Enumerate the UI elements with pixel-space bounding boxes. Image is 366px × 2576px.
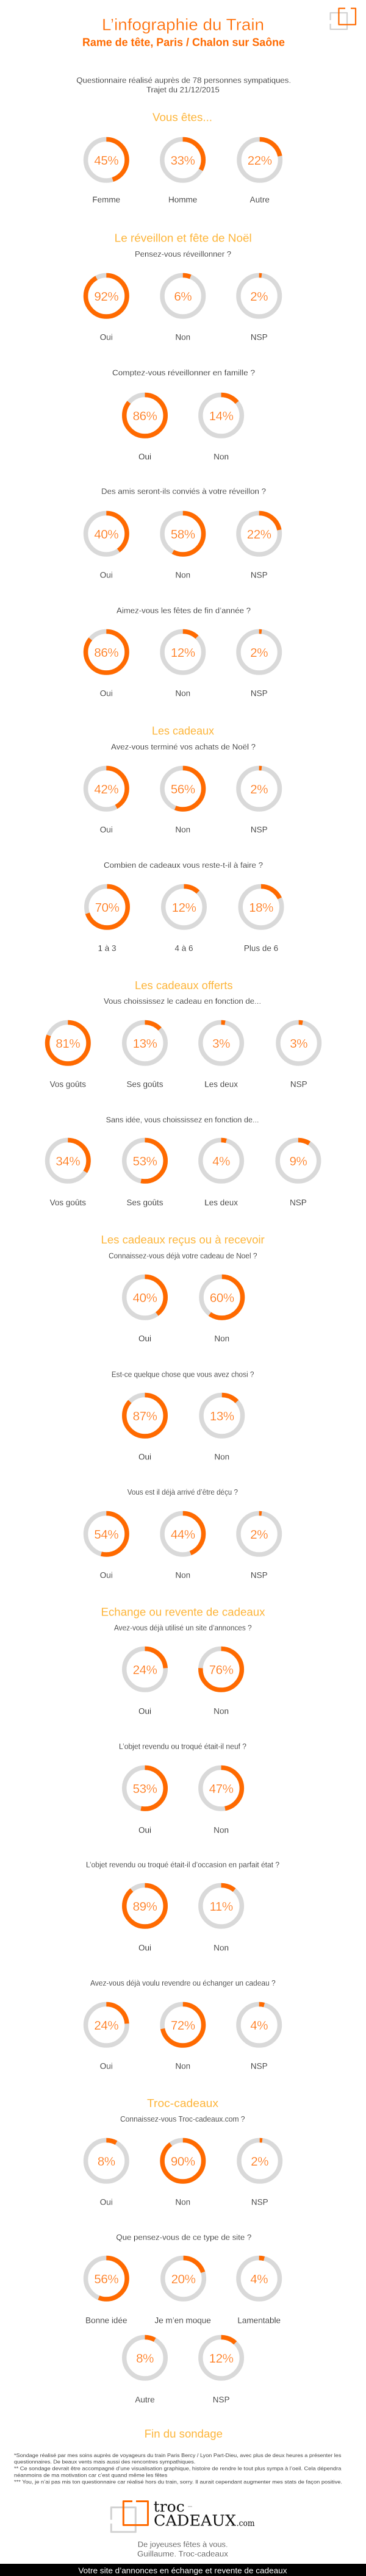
donut: Oui 40% — [86, 513, 127, 580]
donut: Non 47%: 47% — [209, 1782, 234, 1796]
question: Connaissez-vous Troc-cadeaux.com ? — [120, 2114, 245, 2123]
footer bar — [0, 2564, 366, 2576]
panel: connaissez-vous Troc-cadeaux — [86, 2114, 280, 2206]
donut: Je m'en moque 20%: 20% — [171, 2272, 196, 2286]
donut: NSP 2% — [239, 2141, 280, 2206]
donut: Les deux 3%: Les deux — [204, 1080, 238, 1089]
intro text — [76, 76, 291, 95]
donut: Oui 40%: Oui — [100, 571, 113, 580]
donut: Non 60%: Non — [214, 1334, 229, 1343]
donut: Lamentable 4% — [237, 2258, 281, 2325]
panel: connaissez-vous votre cadeau — [109, 1251, 257, 1343]
donut: Oui 24%: 24% — [133, 1663, 157, 1677]
donut: Oui 8%: Oui — [100, 2197, 113, 2206]
donut: Bonne idée 56% — [85, 2258, 127, 2325]
donut: Oui 40%: Oui — [138, 1334, 151, 1343]
donut: NSP 22% — [239, 513, 279, 580]
donut: Non 44% — [162, 1514, 204, 1580]
donut: NSP 4% — [239, 2005, 279, 2071]
donut: Vos goûts 34%: Vos goûts — [50, 1198, 86, 1207]
donut: Non 90%: 90% — [171, 2155, 195, 2169]
donut: Non 11%: Non — [214, 1943, 229, 1952]
heading: Troc-cadeaux: Troc-cadeaux — [147, 2097, 218, 2109]
panel: revendre ou échanger — [86, 1978, 279, 2071]
donut: Lamentable 4%: 4% — [250, 2272, 268, 2286]
donut: NSP 2%: 2% — [250, 290, 268, 304]
footnotes: ** Ce sondage devrait être accompagné d’une visualisation graphique, histoire de rendre le tout plus sympa à l’oeil. Cela dépendra — [14, 2466, 342, 2472]
subtitle: Rame de tête, Paris / Chalon sur Saône — [82, 36, 285, 48]
donut: Non 58% — [162, 513, 204, 580]
panel: Des amis conviés — [86, 487, 279, 580]
donut: Femme 45%: 45% — [94, 154, 118, 168]
donut: NSP 9% — [278, 1140, 319, 1207]
donut: Non 90% — [162, 2141, 204, 2206]
donut: Oui 54% — [86, 1514, 127, 1580]
donut: Non 72%: 72% — [171, 2019, 195, 2033]
donut: NSP 2%: NSP — [251, 2197, 268, 2206]
question: Avez-vous terminé vos achats de Noël ? — [111, 742, 256, 751]
donut: Vos goûts 81% — [48, 1023, 88, 1089]
question: L’objet revendu ou troqué était-il d’occasion en parfait état ? — [86, 1860, 279, 1869]
icon: logo squares — [111, 2502, 148, 2532]
donut: Oui 89%: 89% — [133, 1900, 157, 1914]
donut: NSP 9%: NSP — [290, 1198, 307, 1207]
panel: achats de Noël — [86, 742, 279, 834]
donut: Oui 86%: Oui — [138, 453, 151, 462]
donut: Non 72%: Non — [175, 2062, 190, 2071]
logo wordmark: .com — [237, 2519, 255, 2528]
donut: Non 14%: 14% — [209, 409, 234, 423]
donut: Oui 86%: 86% — [94, 646, 118, 660]
donut: NSP 12%: 12% — [209, 2352, 234, 2366]
panel: quelque chose de choisi — [112, 1370, 254, 1462]
title: L’infographie du Train — [102, 15, 264, 34]
panel: cadeaux restants — [87, 860, 282, 953]
donut: Autre 22% — [239, 140, 280, 204]
donut: Non 6%: 6% — [174, 290, 192, 304]
donut: Oui 87% — [124, 1395, 165, 1462]
donut: Non 13%: 13% — [210, 1409, 234, 1423]
donut: 4 à 6 12%: 12% — [172, 901, 196, 915]
footnotes: questionnaires. De beaux vents mais aussi des rencontres sympathiques. — [14, 2459, 195, 2465]
icon: corner logo squares — [331, 9, 356, 29]
donut: Oui 92%: Oui — [100, 333, 113, 342]
donut: NSP 2% — [239, 632, 279, 698]
donut: NSP 2% — [239, 1514, 279, 1580]
donut: NSP 2%: NSP — [251, 1571, 268, 1580]
donut: Vos goûts 81%: Vos goûts — [50, 1080, 86, 1089]
donut: Plus de 6 18%: Plus de 6 — [244, 943, 278, 953]
donut: NSP 4%: 4% — [250, 2019, 268, 2033]
donut: Oui 89%: Oui — [138, 1943, 151, 1952]
donut: Oui 24% — [86, 2005, 127, 2071]
donut: Lamentable 4%: Lamentable — [237, 2316, 281, 2325]
donut: Vos goûts 34%: 34% — [56, 1154, 80, 1168]
donut: Ses goûts 53% — [124, 1140, 165, 1207]
donut: Oui 42%: 42% — [94, 782, 118, 796]
heading: Les cadeaux: Les cadeaux — [152, 724, 214, 737]
donut: Oui 87%: 87% — [133, 1409, 157, 1423]
donut: NSP 2%: 2% — [251, 2155, 268, 2169]
donut: Non 14% — [201, 395, 242, 462]
footnotes: *** You, je n’ai pas mis ton questionnaire car réalisé hors du train, sorry. Il aurait cependant augmenter mes stats de façon positive. — [14, 2478, 342, 2485]
panel: sans idée — [48, 1115, 319, 1207]
donut: NSP 2% — [239, 276, 279, 342]
question: Aimez-vous les fêtes de fin d’année ? — [117, 606, 251, 615]
panel: site d'annonces — [114, 1623, 252, 1716]
question: L’objet revendu ou troqué était-il neuf ? — [119, 1742, 246, 1751]
donut: Oui 87%: Oui — [138, 1453, 151, 1462]
heading: Fin du sondage: Fin du sondage — [145, 2428, 223, 2440]
donut: Ses goûts 13%: 13% — [133, 1037, 157, 1051]
donut: 4 à 6 12%: 4 à 6 — [174, 943, 193, 953]
donut: Non 6%: Non — [175, 333, 190, 342]
donut: Oui 24%: 24% — [94, 2019, 118, 2033]
question: Combien de cadeaux vous reste-t-il à faire ? — [104, 860, 263, 870]
donut: Homme 33%: Homme — [168, 195, 197, 204]
donut: Non 56%: Non — [175, 825, 190, 834]
donut: Les deux 3%: 3% — [212, 1037, 230, 1051]
panel: Pensez-vous réveillonner — [86, 249, 279, 342]
donut: Femme 45% — [86, 140, 127, 204]
donut: Oui 24% — [124, 1649, 165, 1716]
donut: Non 12%: Non — [175, 689, 190, 698]
logo wordmark: troc — [154, 2498, 185, 2515]
donut: NSP 12%: NSP — [213, 2395, 229, 2404]
donut: Oui 86%: Oui — [100, 689, 113, 698]
donut: Non 47% — [201, 1768, 242, 1834]
donut: Non 76% — [201, 1649, 242, 1716]
donut: Oui 40% — [124, 1277, 165, 1343]
donut: Non 14%: Non — [214, 453, 229, 462]
donut: Non 72% — [162, 2005, 204, 2071]
donut: Ses goûts 53%: Ses goûts — [126, 1198, 163, 1207]
donut: Non 11%: 11% — [209, 1900, 233, 1914]
donut: Non 47%: Non — [214, 1825, 229, 1834]
donut: Non 90%: Non — [175, 2197, 190, 2206]
donut: Non 12% — [162, 632, 204, 698]
heading: Les cadeaux reçus ou à recevoir: Les cadeaux reçus ou à recevoir — [101, 1234, 265, 1246]
donut: Non 56% — [162, 768, 204, 834]
donut: Oui 24%: Oui — [138, 1706, 151, 1716]
donut: Homme 33% — [162, 140, 203, 204]
donut: NSP 22%: 22% — [247, 528, 271, 542]
donut: Je m'en moque 20% — [154, 2258, 211, 2325]
sign-off text — [137, 2539, 229, 2558]
donut: Oui 53%: Oui — [138, 1825, 151, 1834]
donut: Oui 8%: 8% — [98, 2155, 115, 2169]
donut: Bonne idée 56%: Bonne idée — [85, 2316, 127, 2325]
intro text: Trajet du 21/12/2015 — [146, 85, 220, 95]
donut: Non 6% — [162, 276, 204, 342]
question: Pensez-vous réveillonner ? — [135, 249, 231, 259]
donut: Autre 8%: 8% — [136, 2352, 154, 2366]
donut: Oui 42% — [86, 768, 127, 834]
donut: NSP 2%: NSP — [251, 825, 268, 834]
donut: Oui 92% — [86, 276, 127, 342]
logo wordmark: CADEAUX — [154, 2512, 237, 2530]
donut: Non 60%: 60% — [210, 1291, 234, 1305]
question: Avez-vous déjà utilisé un site d’annonces ? — [114, 1623, 252, 1632]
donut: 1 à 3 70% — [87, 887, 127, 953]
donut: Non 11% — [201, 1886, 242, 1952]
sign-off text: De joyeuses fêtes à vous. — [138, 2539, 228, 2549]
question: Que pensez-vous de ce type de site ? — [116, 2233, 251, 2242]
sign-off text: Guillaume. Troc-cadeaux — [137, 2549, 229, 2558]
question: Des amis seront-ils conviés à votre réveillon ? — [101, 487, 266, 496]
logo wordmark — [154, 2498, 255, 2530]
panel: déjà déçu — [86, 1487, 279, 1580]
donut: Vos goûts 34% — [48, 1140, 88, 1207]
donut: 1 à 3 70%: 1 à 3 — [98, 943, 117, 953]
donut: Oui 86% — [124, 395, 165, 462]
donut: Autre 22%: Autre — [250, 195, 270, 204]
question: Est-ce quelque chose que vous avez chosi ? — [112, 1370, 254, 1379]
donut: NSP 2%: NSP — [251, 333, 268, 342]
panel: choix du cadeau — [48, 996, 319, 1089]
heading: Les cadeaux offerts: Les cadeaux offerts — [135, 979, 233, 992]
donut: Plus de 6 18%: 18% — [249, 901, 273, 915]
donut: Non 56%: 56% — [171, 782, 195, 796]
donut: Non 76%: 76% — [209, 1663, 234, 1677]
donut: Ses goûts 53%: 53% — [133, 1154, 157, 1168]
donut: NSP 2% — [239, 768, 279, 834]
panel: Vous êtes donuts — [86, 140, 280, 204]
donut: NSP 4%: NSP — [251, 2062, 268, 2071]
donut: Oui 42%: Oui — [100, 825, 113, 834]
donut: Non 12%: 12% — [171, 646, 195, 660]
donut: NSP 2%: 2% — [250, 1528, 268, 1542]
donut: Non 13% — [201, 1395, 243, 1462]
donut: Non 58%: 58% — [171, 528, 195, 542]
panel: Comptez-vous réveillonner en famille — [112, 368, 255, 462]
donut: 1 à 3 70%: 70% — [95, 901, 120, 915]
question: Vous est il déjà arrivé d’être déçu ? — [127, 1487, 238, 1497]
footnotes: néanmoins de ma motivation car c’est quand même les fêtes — [14, 2472, 167, 2478]
donut: Non 44%: 44% — [171, 1528, 195, 1542]
donut: Ses goûts 13%: Ses goûts — [126, 1080, 163, 1089]
donut: NSP 2%: NSP — [251, 689, 268, 698]
donut: Oui 53% — [124, 1768, 165, 1834]
donut: Oui 54%: 54% — [94, 1528, 118, 1542]
donut: Femme 45%: Femme — [92, 195, 120, 204]
panel: objet d'occasion — [86, 1860, 279, 1952]
donut: Oui 8% — [86, 2141, 127, 2206]
donut: NSP 3%: NSP — [290, 1080, 307, 1089]
donut: NSP 12% — [201, 2338, 242, 2404]
donut: Les deux 3% — [201, 1023, 242, 1089]
donut: NSP 3%: 3% — [290, 1037, 307, 1051]
donut: Oui 54%: Oui — [100, 1571, 113, 1580]
donut: Oui 89% — [124, 1886, 165, 1952]
donut: Bonne idée 56%: 56% — [94, 2272, 118, 2286]
donut: Les deux 4%: Les deux — [204, 1198, 238, 1207]
donut: Ses goûts 13% — [124, 1023, 165, 1089]
donut: NSP 2%: 2% — [250, 782, 268, 796]
donut: Je m'en moque 20%: Je m’en moque — [154, 2316, 211, 2325]
donut: Plus de 6 18% — [240, 887, 282, 953]
donut: Non 60% — [201, 1277, 243, 1343]
donut: NSP 22%: NSP — [251, 571, 268, 580]
donut: Oui 24%: Oui — [100, 2062, 113, 2071]
donut: NSP 3% — [278, 1023, 319, 1089]
donut: Homme 33%: 33% — [171, 154, 195, 168]
logo: troc-cadeaux.com — [111, 2498, 255, 2532]
heading: Vous êtes: Vous êtes... — [152, 111, 212, 123]
question: Avez-vous déjà voulu revendre ou échanger un cadeau ? — [90, 1978, 276, 1987]
donut: Non 58%: Non — [175, 571, 190, 580]
intro text: Questionnaire réalisé auprès de 78 personnes sympatiques. — [76, 76, 291, 85]
donut: Oui 86% — [86, 632, 127, 698]
donut: Autre 8%: Autre — [135, 2395, 155, 2404]
question: Connaissez-vous déjà votre cadeau de Noel ? — [109, 1251, 257, 1260]
donut: Les deux 4% — [201, 1140, 242, 1207]
donut: Autre 8% — [124, 2338, 165, 2404]
question: Comptez-vous réveillonner en famille ? — [112, 368, 255, 377]
footer bar: Votre site d’annonces en échange et revente de cadeaux — [78, 2566, 287, 2575]
panel: Aimez-vous les fêtes — [86, 606, 279, 698]
donut: Non 13%: Non — [214, 1453, 229, 1462]
donut: Oui 40%: 40% — [133, 1291, 157, 1305]
donut: Autre 22%: 22% — [248, 154, 272, 168]
donut: NSP 2%: 2% — [250, 646, 268, 660]
heading: Le réveillon et fête de Noël: Le réveillon et fête de Noël — [115, 232, 252, 244]
donut: Vos goûts 81%: 81% — [56, 1037, 80, 1051]
donut: Oui 92%: 92% — [94, 290, 118, 304]
question: Sans idée, vous choississez en fonction de... — [106, 1115, 259, 1125]
donut: Oui 86%: 86% — [133, 409, 157, 423]
panel: que pensez-vous de ce type de site — [85, 2233, 281, 2404]
question: Vous choississez le cadeau en fonction de... — [104, 996, 261, 1006]
donut: Non 76%: Non — [214, 1706, 229, 1716]
donut: Non 44%: Non — [175, 1571, 190, 1580]
heading: Echange ou revente de cadeaux: Echange ou revente de cadeaux — [101, 1606, 265, 1619]
footnotes — [14, 2452, 342, 2485]
donut: NSP 9%: 9% — [289, 1154, 307, 1168]
donut: 4 à 6 12% — [163, 887, 204, 953]
donut: Oui 53%: 53% — [133, 1782, 157, 1796]
donut: Les deux 4%: 4% — [212, 1154, 230, 1168]
panel: objet neuf — [119, 1742, 246, 1834]
donut: Oui 40%: 40% — [94, 528, 118, 542]
footnotes: *Sondage réalisé par mes soins auprès de voyageurs du train Paris Bercy / Lyon Part-Dieu, avec plus de deux heures a présenter les — [14, 2452, 341, 2458]
